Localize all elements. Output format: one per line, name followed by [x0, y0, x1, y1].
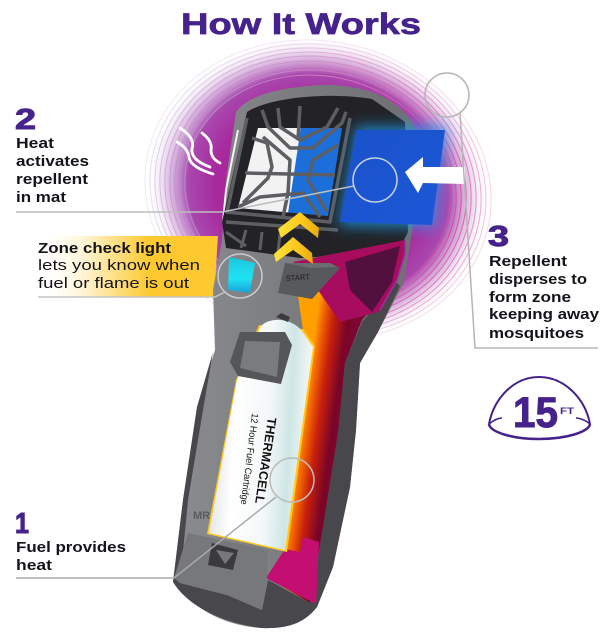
magenta cavity — [268, 240, 405, 603]
step 3: repellent disperses — [488, 221, 600, 342]
step 3: repellent disperses: mosquitoes — [489, 325, 584, 342]
step 2: heat activates: Heat — [16, 135, 54, 152]
icon: 15 ft radius dome: 15 — [513, 389, 558, 437]
side grip — [173, 282, 400, 628]
repellent mat — [340, 130, 445, 225]
step 3: repellent disperses: Repellent — [489, 253, 567, 270]
start button: START — [286, 272, 310, 283]
MR label: MR — [193, 510, 210, 522]
step 2: heat activates: in mat — [16, 189, 66, 206]
step 1: fuel provides heat — [15, 508, 126, 574]
fuel cartridge: 12 Hour Fuel Cartridge — [238, 413, 260, 505]
step 3: repellent disperses: form zone — [489, 289, 571, 306]
zone check LED — [228, 257, 255, 293]
step 1: fuel provides heat: 1 — [15, 508, 29, 540]
blue glow — [338, 126, 447, 228]
grill ribs — [226, 106, 350, 230]
step 2: heat activates: activates — [16, 153, 89, 170]
yellow chevrons — [274, 212, 319, 264]
start button — [278, 263, 340, 299]
arrow — [405, 157, 465, 193]
step 3: repellent disperses: disperses to — [489, 271, 587, 288]
callout band: zone check light: Zone check light — [38, 240, 171, 257]
fuel cartridge glow — [207, 325, 315, 552]
heat wave icon — [177, 128, 220, 174]
callout band: zone check light: lets you know when — [38, 257, 200, 274]
device body shell — [173, 85, 420, 628]
step 2: heat activates: repellent — [16, 171, 88, 188]
lower magenta chamber — [266, 537, 319, 604]
on/off slider — [230, 332, 292, 384]
step 1: fuel provides heat: heat — [16, 557, 52, 574]
background: heat zone with contour lines — [117, 6, 519, 374]
repellent mat behind grill — [238, 128, 342, 216]
step 2: heat activates — [15, 104, 89, 206]
step 3: repellent disperses: keeping away — [489, 306, 600, 323]
device: thermacell repeller — [173, 85, 447, 628]
icon: 15 ft radius dome — [489, 377, 590, 439]
callout band: zone check light — [38, 236, 218, 297]
step 1: fuel provides heat: Fuel provides — [16, 539, 126, 556]
callout band: zone check light: fuel or flame is out — [38, 275, 190, 292]
fuel cartridge: THERMACELL — [252, 417, 279, 505]
step 2: heat activates: 2 — [15, 104, 36, 136]
bottom cap — [174, 533, 268, 610]
fuel cartridge — [209, 320, 313, 550]
title: How It Works — [181, 8, 421, 41]
icon: 15 ft radius dome: FT — [560, 406, 575, 416]
callout circles and leader lines — [16, 73, 598, 578]
step 3: repellent disperses: 3 — [488, 221, 509, 253]
head dark frame — [222, 96, 408, 258]
